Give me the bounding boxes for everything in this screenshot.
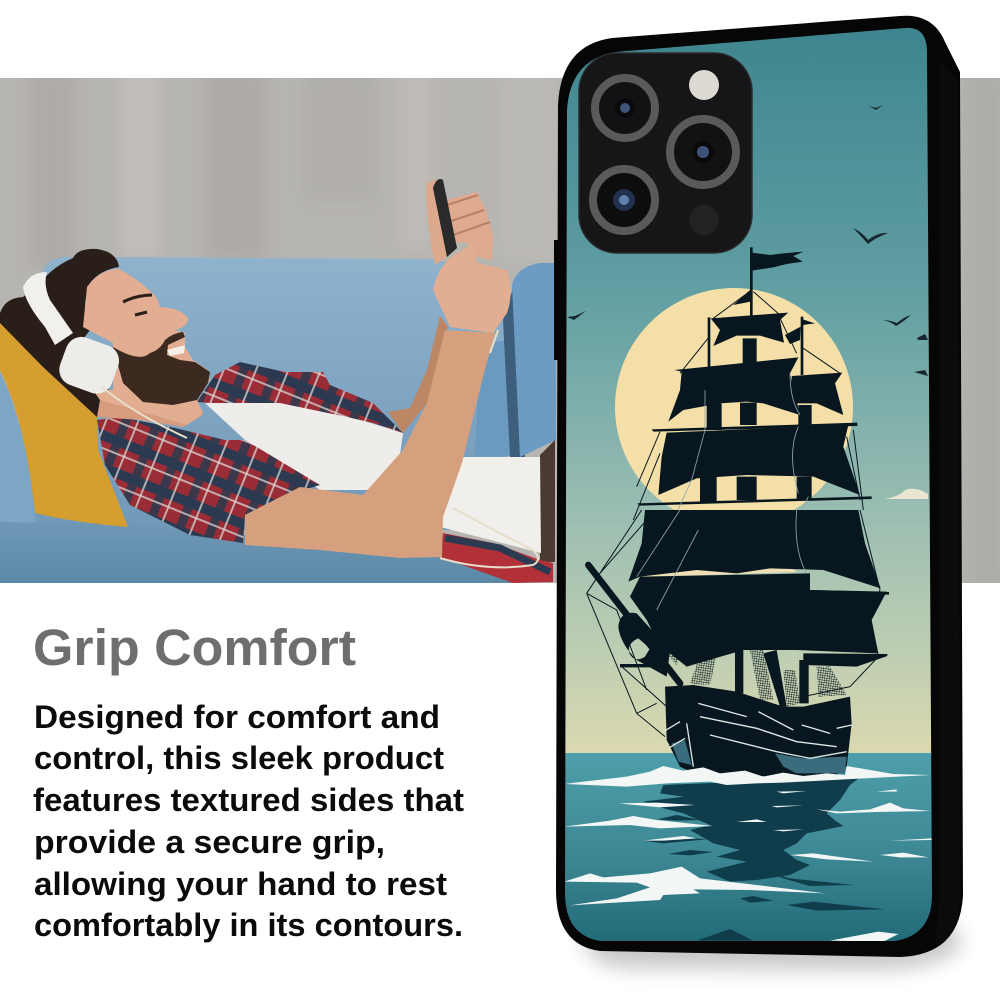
right sail — [792, 373, 843, 415]
rigging nets — [669, 650, 846, 706]
sofa seat — [0, 522, 515, 583]
second sail — [668, 357, 800, 422]
body text: allowing your hand to rest — [34, 866, 447, 902]
cushion — [0, 323, 128, 527]
moon — [615, 288, 853, 526]
sea foam and waves — [563, 766, 932, 942]
front hand — [433, 243, 510, 333]
hull trim lines — [663, 703, 852, 767]
upper back hand: fingers — [447, 192, 493, 260]
top sail — [711, 313, 788, 346]
plaid chest — [197, 362, 403, 433]
third sail — [658, 425, 860, 495]
eye and brow — [123, 295, 152, 315]
beard — [113, 332, 210, 405]
sofa right cushion — [512, 263, 556, 457]
sea shadows and reflection — [643, 777, 885, 941]
figurehead — [618, 613, 670, 677]
body text — [33, 699, 464, 943]
white t-shirt — [205, 403, 403, 490]
body text: comfortably in its contours. — [34, 907, 463, 943]
hair — [0, 249, 119, 417]
birds — [567, 105, 928, 376]
person reclining with phone — [0, 179, 555, 583]
headphone ear cup — [55, 332, 124, 398]
headphone band — [23, 272, 73, 345]
small pennants — [733, 290, 815, 344]
body text: Designed for comfort and — [34, 699, 440, 735]
body text: provide a secure grip, — [34, 824, 385, 860]
left and right topmasts — [708, 317, 803, 375]
third yard — [652, 423, 857, 432]
lens bottom left — [593, 169, 655, 231]
cream gaps under sails — [640, 568, 797, 577]
plaid hem — [440, 533, 553, 583]
lens right — [670, 119, 736, 185]
sea — [560, 753, 940, 948]
bowsprit — [588, 565, 680, 683]
body text: control, this sleek product — [34, 740, 444, 776]
fifth sail — [630, 573, 887, 667]
fourth sail — [628, 510, 881, 588]
front arm — [245, 330, 495, 558]
hull light panels — [672, 740, 847, 773]
lower masts — [735, 650, 809, 707]
back arm — [388, 316, 448, 433]
cloud — [885, 489, 928, 499]
neck — [97, 400, 203, 427]
side highlight — [935, 60, 960, 948]
sofa — [0, 257, 556, 583]
body text: features textured sides that — [33, 782, 464, 818]
sofa right section — [475, 340, 510, 456]
case drop shadow — [585, 920, 962, 970]
flash — [689, 70, 719, 100]
main mast — [750, 247, 753, 317]
smile teeth — [167, 345, 185, 356]
t-shirt right part — [440, 457, 541, 553]
pennant flag — [752, 252, 803, 271]
sensor — [689, 205, 719, 235]
fourth yard — [637, 496, 872, 506]
phone case — [554, 16, 963, 970]
jeans — [540, 440, 555, 562]
camera module — [579, 53, 752, 253]
sofa dark fold — [503, 285, 525, 457]
yards — [620, 590, 889, 667]
upper back hand: thumb — [426, 180, 447, 265]
mast blocks — [700, 338, 812, 502]
side button — [554, 240, 559, 360]
lens top left — [595, 78, 655, 138]
headphone cable — [102, 330, 538, 567]
screen artwork — [560, 20, 940, 948]
sofa left arm — [0, 372, 36, 530]
case body — [556, 16, 963, 957]
face — [83, 269, 210, 425]
sofa back cushion — [0, 257, 507, 530]
heading: Grip Comfort — [33, 619, 356, 676]
upper ship rig — [633, 247, 872, 520]
plaid sleeve — [97, 417, 320, 543]
background photo: concrete wall — [0, 70, 1000, 590]
phone in hand — [433, 179, 457, 257]
hull — [665, 685, 852, 777]
lower ship — [587, 510, 889, 777]
